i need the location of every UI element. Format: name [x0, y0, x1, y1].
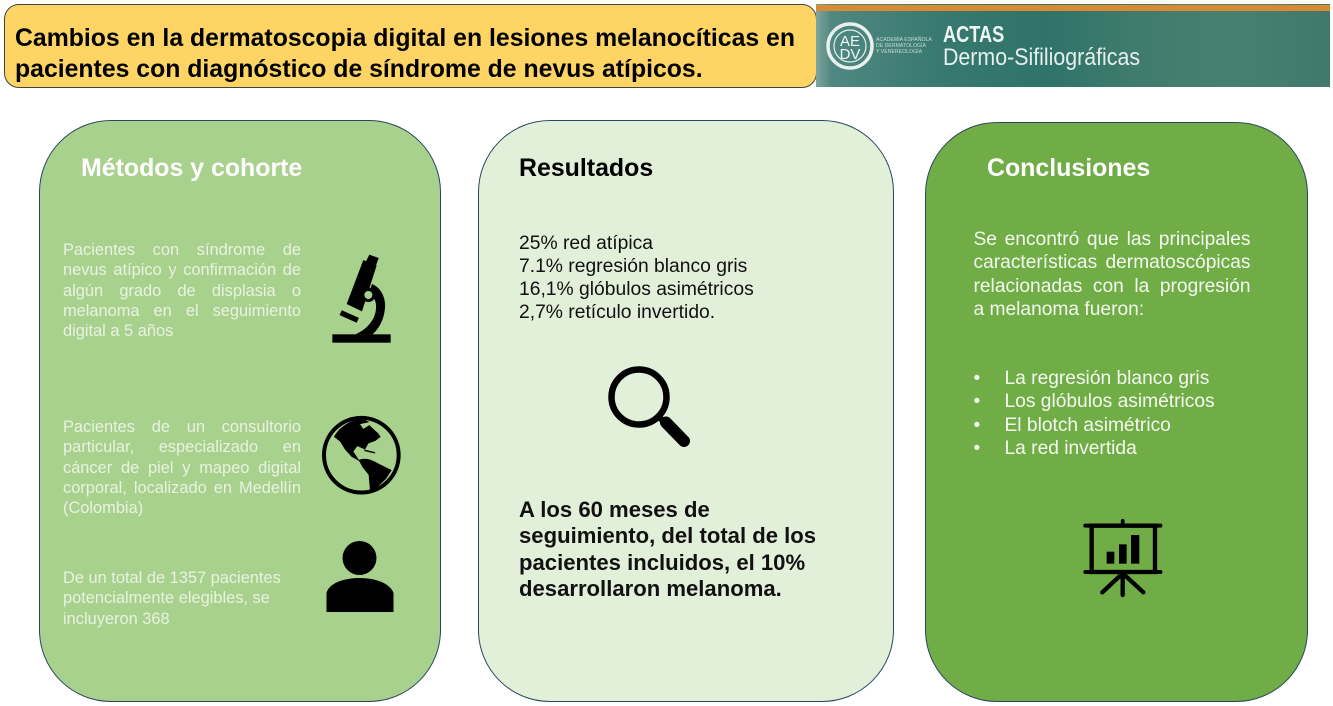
bullet list: La regresión blanco gris — [1004, 368, 1209, 389]
journal name: ACTAS — [943, 21, 1004, 47]
panel: conclusiones — [925, 122, 1308, 702]
text: pacientes con síndrome: melanoma en el seguimiento — [63, 302, 301, 320]
panel: resultados — [478, 120, 894, 702]
conclusion text: Se encontró que las principales — [974, 229, 1250, 250]
text: consultorio: cáncer de piel y mapeo digital — [63, 459, 301, 477]
key finding — [519, 496, 816, 601]
academy name: ACADEMIA ESPAÑOLA — [876, 37, 932, 43]
AEDV logo — [826, 22, 874, 70]
text: consultorio — [63, 418, 301, 517]
conclusion text: a melanoma fueron: — [974, 299, 1144, 320]
text: pacientes con síndrome — [63, 241, 301, 340]
results list — [519, 232, 754, 323]
text: pacientes con síndrome: algún grado de displasia o — [63, 282, 301, 300]
icon: magnifying glass — [608, 366, 690, 447]
bullet list: • — [974, 415, 980, 436]
orange top strip — [816, 5, 1330, 11]
academy name: DE DERMATOLOGÍA — [876, 43, 926, 49]
heading: métodos: Métodos y cohorte — [81, 154, 302, 182]
title banner — [4, 4, 817, 88]
AEDV logo: AE — [840, 33, 860, 50]
text: consultorio: corporal, localizado en Medellín — [63, 479, 301, 497]
results list: 2,7% retículo invertido. — [519, 302, 715, 323]
text: consultorio: Pacientes de un consultorio — [63, 418, 301, 436]
bullet list: • — [974, 368, 980, 389]
title text: pacientes con diagnóstico de síndrome de nevus atípicos. — [15, 56, 703, 83]
bullet list — [974, 368, 1215, 459]
text: pacientes con síndrome: Pacientes con síndrome de — [63, 241, 301, 259]
text: total de pacientes: incluyeron 368 — [63, 610, 170, 628]
results list: 16,1% glóbulos asimétricos — [519, 279, 754, 300]
icon: person — [326, 541, 394, 612]
icon: globe — [322, 416, 401, 494]
journal subtitle: Dermo-Sifiliográficas — [943, 44, 1140, 71]
results list: 25% red atípica — [519, 232, 653, 254]
conclusion text: relacionadas con la progresión — [974, 276, 1250, 297]
text: pacientes con síndrome: nevus atípico y confirmación de — [63, 261, 301, 279]
conclusion text: características dermatoscópicas — [974, 252, 1250, 273]
text: pacientes con síndrome: digital a 5 años — [63, 322, 173, 340]
bullet list: El blotch asimétrico — [1004, 415, 1171, 436]
title text: Cambios en la dermatoscopia digital en lesiones melanocíticas en — [15, 25, 795, 52]
bullet list: La red invertida — [1004, 438, 1137, 459]
icon: presentation board — [1083, 518, 1162, 598]
journal header: ACTAS Dermo-Sifiliográficas — [816, 4, 1330, 87]
key finding: desarrollaron melanoma. — [519, 576, 782, 601]
bullet list: • — [974, 391, 980, 412]
key finding: seguimiento, del total de los — [519, 523, 816, 548]
conclusion text — [974, 229, 1250, 320]
academy name: Y VENEREOLOGÍA — [876, 49, 922, 55]
text: total de pacientes — [63, 569, 281, 628]
text: total de pacientes: potencialmente elegibles, se — [63, 589, 270, 607]
title text — [15, 25, 795, 83]
text: consultorio: (Colombia) — [63, 499, 143, 517]
AEDV logo: DV — [840, 46, 860, 63]
heading: resultados: Resultados — [519, 154, 653, 182]
results list: 7.1% regresión blanco gris — [519, 256, 747, 277]
panel: métodos y cohorte — [39, 120, 441, 702]
bullet list: Los glóbulos asimétricos — [1004, 391, 1215, 412]
bullet list: • — [974, 438, 980, 459]
text: consultorio: particular, especializado en — [63, 438, 301, 456]
key finding: A los 60 meses de — [519, 496, 710, 522]
key finding: pacientes incluidos, el 10% — [519, 550, 805, 574]
icon: microscope — [332, 254, 391, 343]
heading: conclusiones: Conclusiones — [987, 154, 1150, 182]
academy name — [876, 36, 932, 55]
text: total de pacientes: De un total de 1357 pacientes — [63, 569, 281, 587]
